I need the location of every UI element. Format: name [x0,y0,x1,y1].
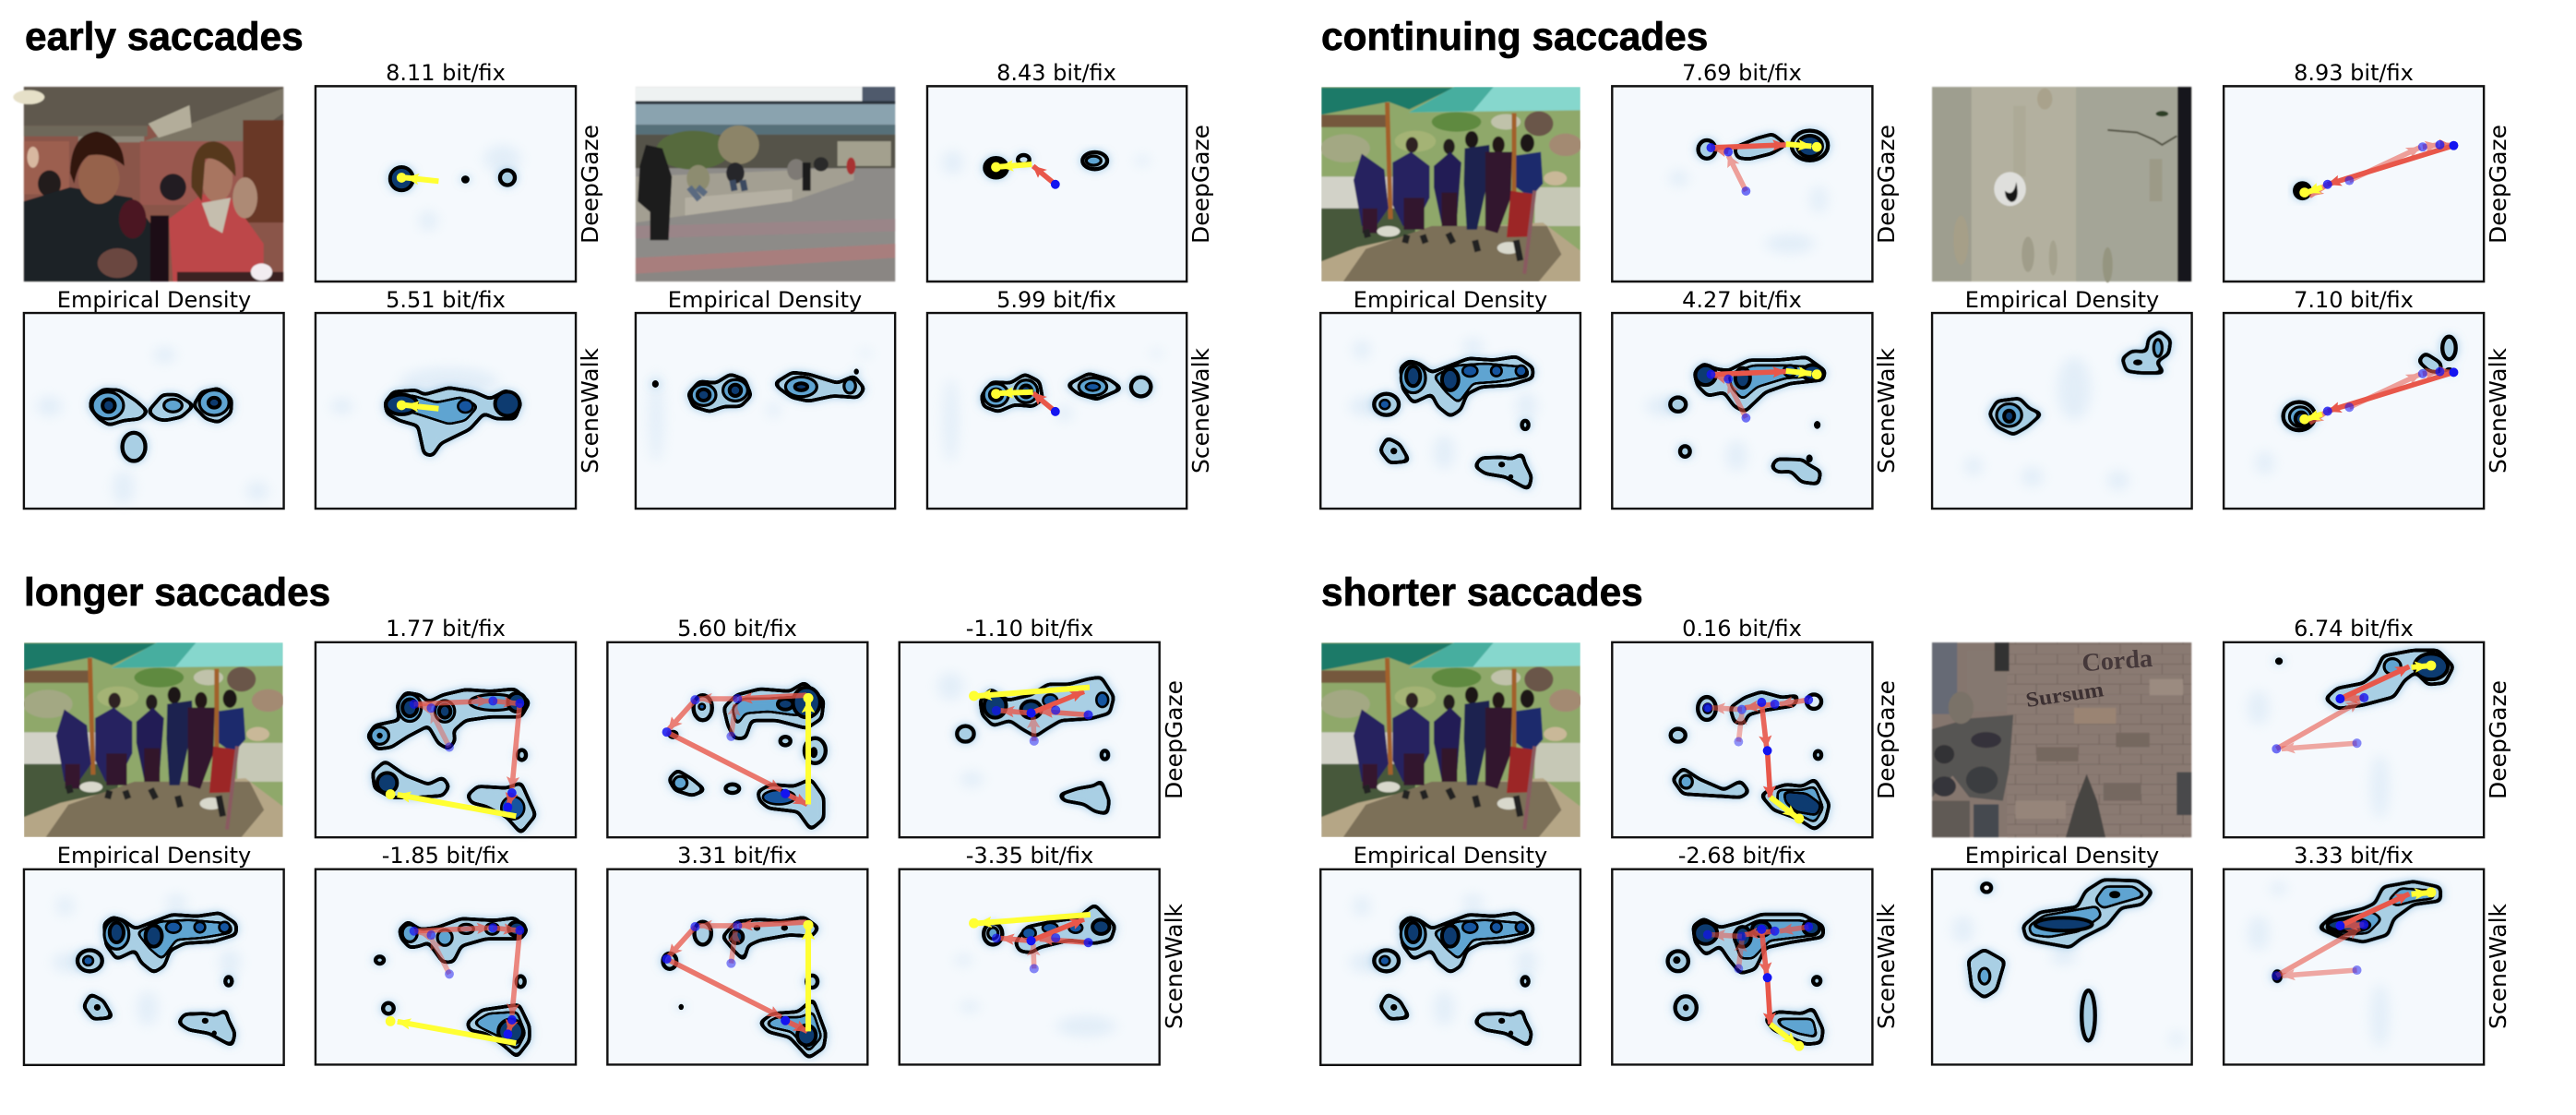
labels: longer saccades: DeepGaze [1161,680,1187,799]
labels: longer saccades: SceneWalk [1161,903,1187,1029]
labels: early saccades: SceneWalk [1187,347,1214,474]
saccade arrows [991,162,1060,189]
contours [1989,331,2170,435]
labels: shorter saccades: 3.33 bit/fix [2294,843,2414,869]
labels: longer saccades: 1.77 bit/fix [386,616,506,641]
panel: SceneWalk 4.27 [1612,313,1872,509]
group: longer saccades, first column of models [316,642,576,1064]
title: longer saccades: longer saccades [24,570,330,614]
contours [376,918,530,1057]
panel: empirical density [24,313,284,509]
contours [2294,182,2311,200]
panel: DeepGaze 6.74 [2224,642,2484,837]
labels: early saccades [57,60,1214,474]
contours [385,388,521,456]
gaze path [2272,887,2436,980]
labels: early saccades: SceneWalk [577,347,603,474]
panel: SceneWalk 5.51 [316,313,576,509]
labels: continuing saccades: 4.27 bit/fix [1682,287,1802,313]
gaze path [386,696,524,816]
group: shorter saccades, second image [1932,642,2484,1064]
labels: shorter saccades: Empirical Density [1354,843,1547,869]
panel: DeepGaze 8.93 [2224,86,2484,282]
photo: courtyard [636,87,895,282]
photo: carved stone tower [1932,642,2191,837]
labels: shorter saccades: SceneWalk [1873,903,1900,1029]
labels: early saccades: 5.51 bit/fix [386,287,506,313]
gaze path [1707,369,1822,423]
contours [652,369,865,412]
saccade arrow [397,173,438,183]
group: continuing saccades, first image [1612,86,1872,509]
contours [368,689,535,833]
labels: continuing saccades: 7.69 bit/fix [1682,60,1802,86]
labels: continuing saccades: DeepGaze [1873,125,1900,244]
labels: continuing saccades: Empirical Density [1965,287,2159,313]
panel: SceneWalk 7.10 [2224,313,2484,509]
labels: shorter saccades: Empirical Density [1965,843,2159,869]
title: continuing saccades: continuing saccades [1321,15,1708,58]
saccade arrows [991,389,1060,416]
group: early saccades, first image [13,86,576,509]
title: shorter saccades: shorter saccades [1321,570,1643,614]
gaze path [662,920,814,1031]
contours [668,683,826,830]
contours [90,389,232,461]
labels: continuing saccades: SceneWalk [2485,347,2511,474]
panel: SceneWalk -2.68 [1612,869,1872,1064]
labels: continuing saccades: Empirical Density [1354,287,1547,313]
panel: SceneWalk -3.35 [900,869,1160,1064]
labels: shorter saccades: DeepGaze [2485,680,2511,799]
contours [984,152,1107,179]
inscription on stone: Sursum [2024,678,2105,713]
panel: DeepGaze -1.10 [900,642,1160,837]
labels: early saccades: Empirical Density [668,287,862,313]
labels: shorter saccades: SceneWalk [2485,903,2511,1029]
contours [2275,651,2453,709]
panel: DeepGaze 5.60 [607,642,867,837]
group: continuing saccades, second image [1932,86,2484,509]
gaze path [1703,695,1813,823]
gaze path [969,688,1093,746]
labels: early saccades: DeepGaze [1187,125,1214,244]
contours [663,917,826,1058]
panel: empirical density (continuing) [1320,313,1580,509]
labels: early saccades: 5.99 bit/fix [996,287,1116,313]
panel: SceneWalk 3.33 [2224,869,2484,1064]
contours [957,677,1114,814]
contours [1671,692,1830,830]
group: longer saccades, second and third columns [607,642,1160,1064]
gaze path [386,923,524,1043]
labels: longer saccades [57,616,1187,1029]
labels: longer saccades: Empirical Density [57,843,251,869]
contours [982,374,1151,412]
group: shorter saccades, first image [1612,642,1872,1064]
gaze path [662,693,814,804]
gaze path [969,915,1093,974]
labels: continuing saccades [1354,60,2511,474]
panel: empirical density (shorter) [1320,869,1580,1065]
panel: DeepGaze 0.16 [1612,642,1872,837]
panel: SceneWalk 5.99 [927,313,1187,509]
photo: restaurant [13,87,283,282]
panel: DeepGaze 7.69 [1612,86,1872,282]
gaze path [2299,140,2458,198]
panel: SceneWalk -1.85 [316,869,576,1064]
gaze path [2299,367,2458,425]
title: early saccades: early saccades [25,15,304,58]
photo: people under umbrellas (continuing) [1320,87,1582,282]
labels: shorter saccades: DeepGaze [1873,680,1900,799]
contours [1699,131,1828,161]
contours [984,905,1115,953]
panel: SceneWalk 3.31 [607,869,867,1064]
labels: longer saccades: -3.35 bit/fix [966,843,1093,869]
labels: early saccades: DeepGaze [577,125,603,244]
panel: DeepGaze 8.11 [316,86,576,282]
inscription on stone: Corda [2081,644,2153,677]
saccade arrow [397,401,438,410]
contours [2272,881,2440,983]
panel: empirical density (longer) [24,869,284,1065]
labels: continuing saccades: SceneWalk [1873,347,1900,474]
labels: continuing saccades: 8.93 bit/fix [2294,60,2414,86]
labels: early saccades: 8.11 bit/fix [386,60,506,86]
contours [1670,357,1825,484]
labels: continuing saccades: 7.10 bit/fix [2294,287,2414,313]
photo: people under umbrellas (shorter) [1320,642,1582,837]
labels: shorter saccades: -2.68 bit/fix [1678,843,1806,869]
labels: longer saccades: 5.60 bit/fix [677,616,797,641]
labels: longer saccades: -1.10 bit/fix [966,616,1093,641]
group: early saccades, second image [636,86,1187,509]
panel: DeepGaze 1.77 [316,642,576,837]
labels: longer saccades: 3.31 bit/fix [677,843,797,869]
contours [1668,915,1823,1044]
labels: shorter saccades: 6.74 bit/fix [2294,616,2414,641]
panel: empirical density [1932,313,2192,509]
contours [390,167,515,190]
labels: longer saccades: -1.85 bit/fix [382,843,509,869]
labels: shorter saccades: 0.16 bit/fix [1682,616,1802,641]
labels: early saccades: Empirical Density [57,287,251,313]
gaze path [1707,142,1822,196]
photo: people under umbrellas (longer) [23,642,285,837]
panel: empirical density [1932,869,2192,1064]
photo: wall with smiley sticker [1932,87,2191,282]
panel: DeepGaze 8.43 [927,86,1187,282]
labels: continuing saccades: DeepGaze [2485,125,2511,244]
contours [1969,880,2152,1040]
labels: early saccades: 8.43 bit/fix [996,60,1116,86]
gaze path [1703,922,1813,1051]
labels: shorter saccades [1354,616,2511,1029]
panel: empirical density [636,313,895,509]
contours [2284,337,2456,430]
gaze path [2272,661,2436,753]
